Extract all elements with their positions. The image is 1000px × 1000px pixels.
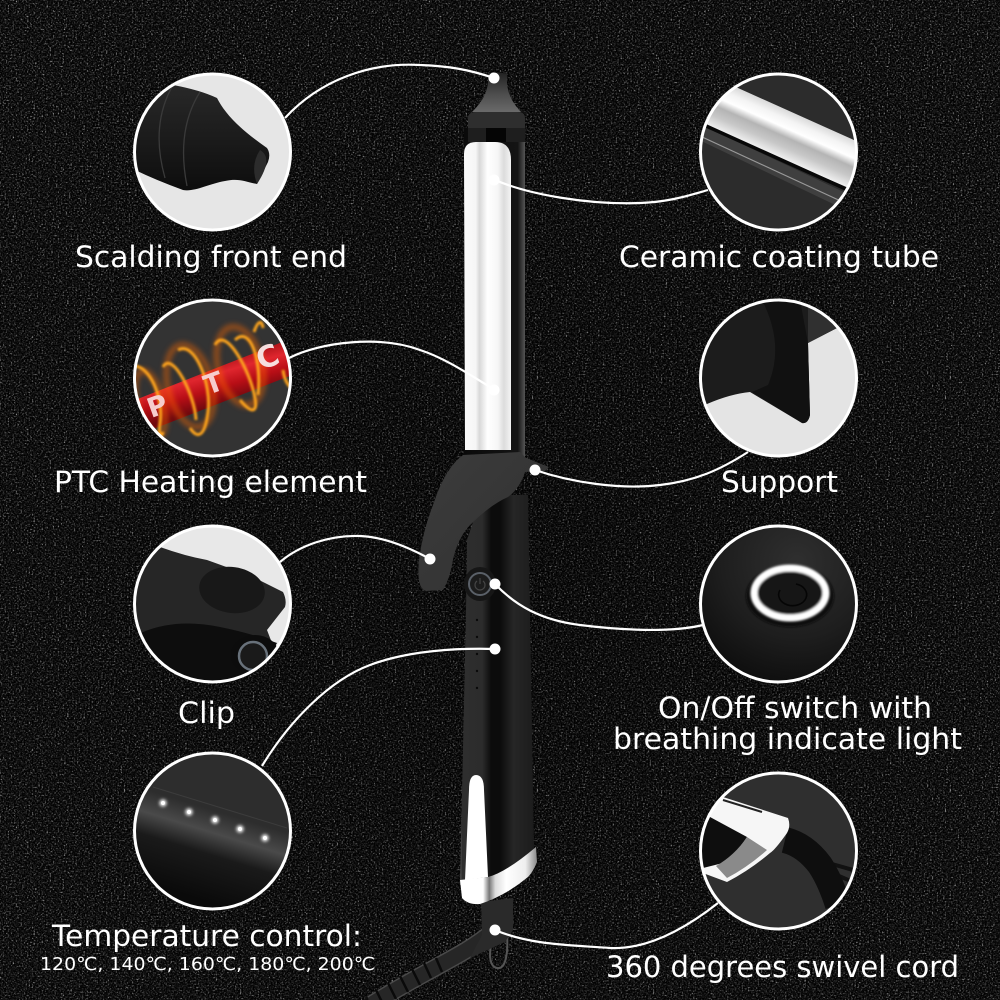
curling iron product — [372, 72, 549, 1000]
label: Temperature control: — [51, 919, 362, 953]
label second line: breathing indicate light — [613, 722, 962, 756]
panel: on/off switch — [613, 520, 962, 756]
PTC letters: C — [252, 337, 284, 378]
label: 360 degrees swivel cord — [606, 950, 959, 984]
label: On/Off switch with — [658, 691, 932, 725]
panel: clip — [130, 520, 300, 730]
panel: support — [699, 298, 858, 498]
scalding tip — [472, 72, 521, 112]
handle — [460, 495, 534, 885]
connector lines and dots — [262, 65, 748, 948]
barrel collar — [468, 112, 525, 142]
panel: ceramic coating tube — [619, 70, 939, 274]
chrome base band — [460, 847, 537, 904]
label: Ceramic coating tube — [619, 240, 939, 274]
panel: temperature control — [40, 750, 375, 975]
label: Clip — [178, 696, 235, 730]
clip lever and support — [418, 452, 549, 591]
barrel dark back — [464, 128, 525, 458]
panel: PTC heating element — [54, 295, 367, 499]
label: PTC Heating element — [54, 465, 367, 499]
panel: swivel cord — [606, 770, 959, 984]
label: Scalding front end — [75, 240, 347, 274]
PTC letters: P — [143, 389, 172, 425]
temperature values: 120℃, 140℃, 160℃, 180℃, 200℃ — [40, 954, 375, 975]
panel: scalding front end — [75, 70, 347, 274]
PTC letters: T — [200, 366, 228, 402]
temperature dots — [476, 619, 478, 689]
ceramic tube — [464, 142, 511, 450]
chrome accent stripe — [465, 775, 488, 880]
PTC letters — [146, 344, 280, 418]
label: Support — [721, 465, 838, 499]
power button — [464, 567, 496, 601]
swivel cord — [372, 898, 513, 1000]
